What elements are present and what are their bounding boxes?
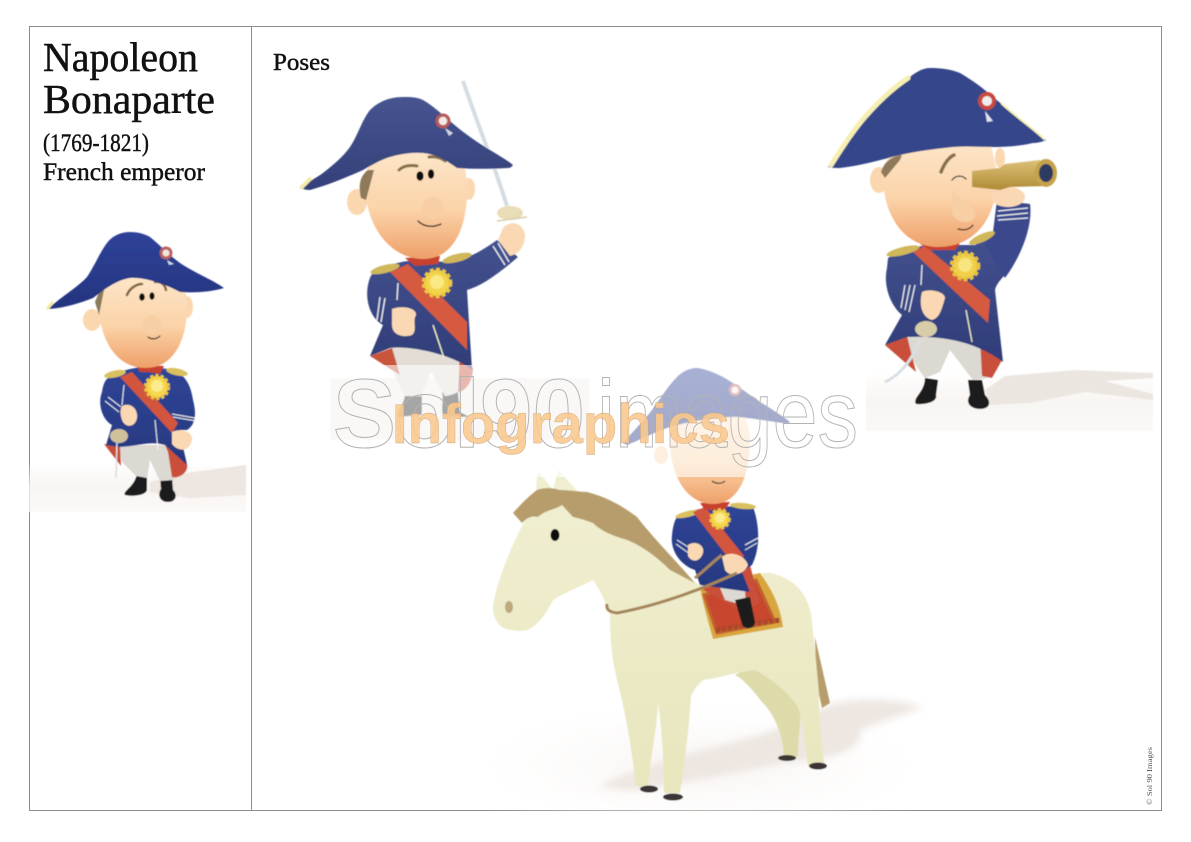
floor and shadow <box>866 370 1153 431</box>
brows and mouth <box>399 157 445 226</box>
hat trim <box>47 302 53 309</box>
raised hand <box>991 187 1025 207</box>
nose <box>952 190 975 222</box>
head <box>98 275 187 368</box>
figure: standing Napoleon <box>29 232 246 512</box>
sword <box>885 321 937 382</box>
coat braid <box>676 538 758 554</box>
epaulets <box>675 502 756 520</box>
boots <box>398 392 470 417</box>
boots <box>125 474 176 502</box>
epaulets <box>886 229 996 259</box>
coat braid <box>901 208 1028 342</box>
medal <box>424 270 450 296</box>
sword hilt <box>110 429 128 478</box>
rider breeches and boot <box>718 583 755 628</box>
coat braid <box>377 243 509 358</box>
rider cockade <box>729 384 741 396</box>
floor shadow <box>29 462 246 512</box>
sash <box>913 246 990 323</box>
collar <box>700 502 730 510</box>
hand on sword <box>921 290 945 320</box>
hat <box>828 68 1046 168</box>
text block: dates and role <box>43 130 206 186</box>
boots <box>915 378 989 409</box>
horse body <box>493 470 825 793</box>
rider hands <box>688 543 748 575</box>
nose <box>143 315 161 335</box>
hooves <box>640 755 827 800</box>
raised sleeve <box>985 200 1030 278</box>
title: Napoleon Bonaparte: Bonaparte <box>43 76 215 122</box>
collar <box>136 365 164 374</box>
hat <box>300 97 513 190</box>
hair <box>881 155 902 178</box>
telescope <box>972 159 1057 190</box>
coat tails <box>885 336 1002 378</box>
watermark wash band <box>320 365 866 477</box>
breeches <box>118 445 174 481</box>
breeches <box>390 345 470 396</box>
left hand <box>392 307 416 336</box>
ears <box>870 148 1005 193</box>
figure: Napoleon raising sword <box>300 81 590 440</box>
medal <box>952 253 978 279</box>
far hind leg <box>735 668 805 757</box>
sash <box>390 264 467 350</box>
coat <box>367 240 518 370</box>
brow, eye and mouth <box>941 155 973 230</box>
head <box>883 140 997 247</box>
hands <box>120 405 192 450</box>
nose <box>422 197 444 219</box>
rider coat tail <box>700 565 760 612</box>
watermark: Sol90 images Infographics: images <box>597 361 858 468</box>
title: Napoleon Bonaparte: Napoleon <box>43 34 198 80</box>
coat <box>885 233 1012 362</box>
ears <box>83 296 193 331</box>
text block: dates and role: French emperor <box>43 159 206 186</box>
coat braid <box>105 385 196 450</box>
raised hand <box>498 223 525 256</box>
epaulets <box>369 250 473 277</box>
rider mouth <box>712 481 725 483</box>
figure: Napoleon on horseback <box>475 368 925 815</box>
hat <box>48 232 224 309</box>
watermark: Sol90 images Infographics: Infographics <box>392 392 730 455</box>
eyes <box>416 169 434 181</box>
cockade <box>160 246 174 265</box>
credit: Sol 90 Images: © Sol 90 Images <box>1146 747 1154 805</box>
collar <box>405 256 440 266</box>
figure: Napoleon with telescope <box>828 68 1153 431</box>
heading: Poses: Poses <box>273 50 330 76</box>
coat <box>100 367 195 465</box>
hat trim <box>831 78 1044 165</box>
mane <box>513 488 695 583</box>
rider hat <box>623 368 790 445</box>
saddle blanket <box>700 573 783 639</box>
floor shadow <box>330 378 590 440</box>
rider coat <box>672 506 758 592</box>
watermark: Sol90 images Infographics: Sol90 <box>333 359 585 468</box>
text block: dates and role: (1769-1821) <box>43 130 149 157</box>
coat tails <box>104 440 187 477</box>
reins <box>607 555 737 613</box>
floor and shadow <box>475 690 925 815</box>
watermark: Sol90 images Infographics <box>333 359 858 468</box>
coat tails <box>370 348 473 392</box>
head <box>365 150 467 259</box>
hat trim <box>301 178 311 188</box>
epaulets <box>104 366 188 380</box>
cockade <box>436 114 453 136</box>
cockade <box>978 92 996 122</box>
hair <box>360 170 374 200</box>
brows and mouth <box>127 282 166 339</box>
medal <box>711 510 729 528</box>
collar <box>920 243 960 250</box>
title: Napoleon Bonaparte <box>43 34 215 122</box>
horse tail <box>815 637 830 708</box>
rider ear <box>654 446 668 464</box>
medal <box>146 376 168 398</box>
hair <box>95 290 104 315</box>
breeches <box>907 335 988 380</box>
sash <box>120 372 178 433</box>
sash <box>693 507 744 568</box>
rider head <box>670 415 750 504</box>
sword <box>463 81 527 221</box>
eye and nostril <box>505 529 560 613</box>
eyes <box>139 292 155 301</box>
ears <box>347 178 475 215</box>
